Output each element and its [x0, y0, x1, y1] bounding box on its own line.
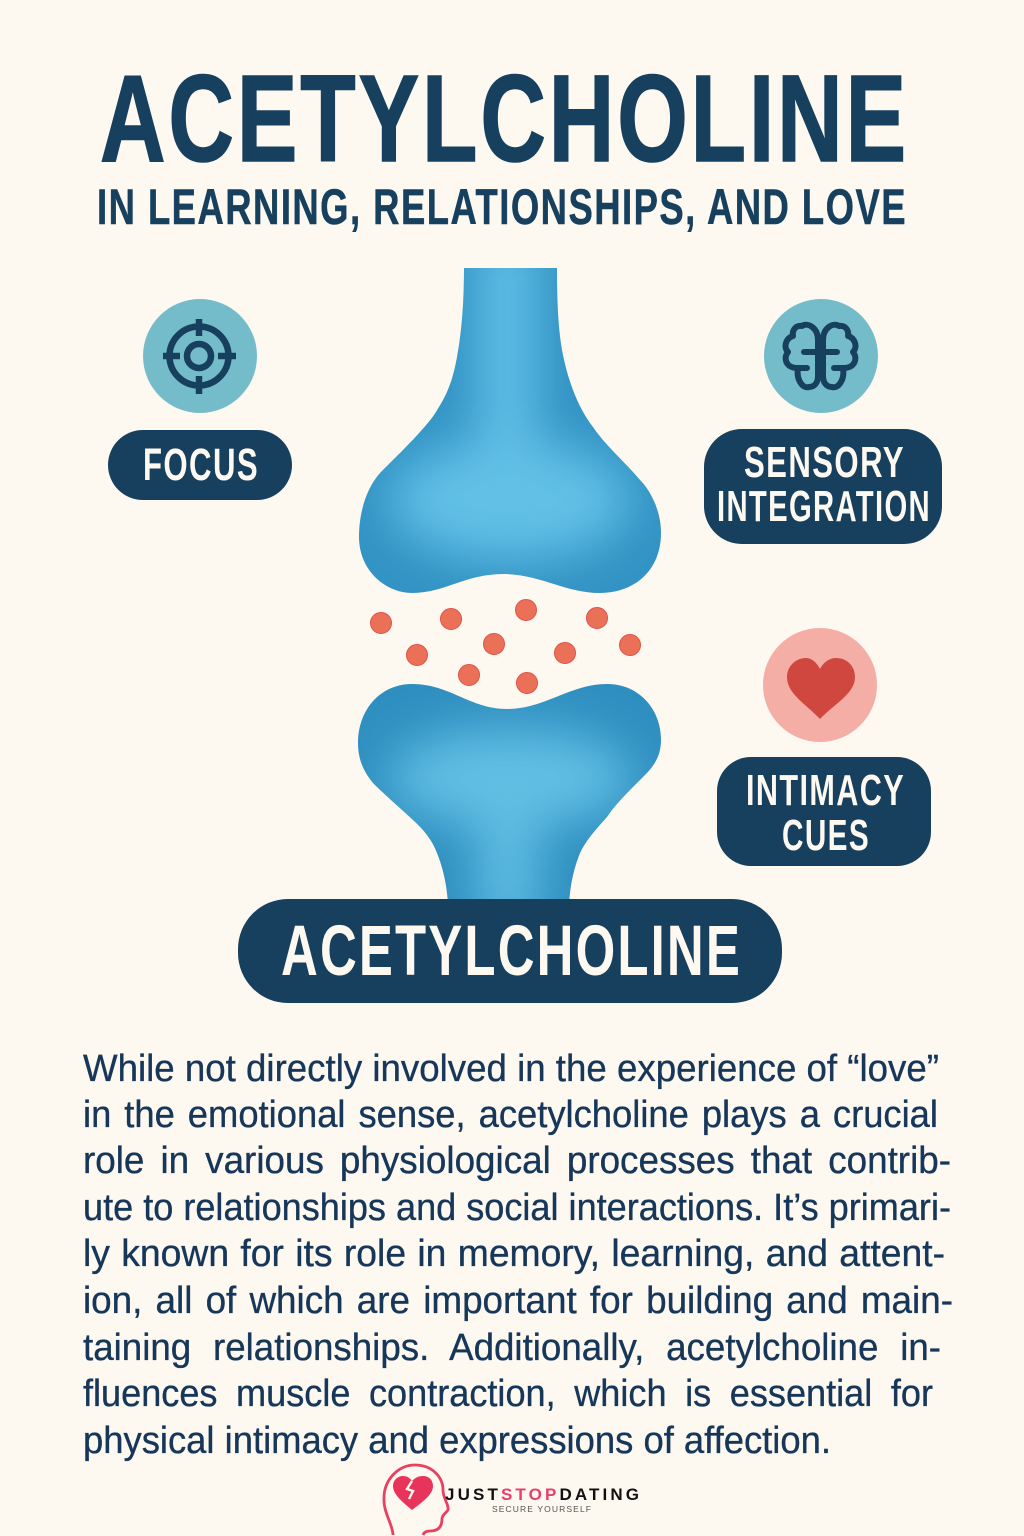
- body text: physical intimacy and expressions of affection.: [83, 1420, 831, 1462]
- logo tagline: SECURE YOURSELF: [492, 1504, 591, 1514]
- body text: role in various physiological processes that contrib-: [83, 1140, 951, 1182]
- body text: taining relationships. Additionally, acetylcholine in-: [83, 1327, 941, 1369]
- label: sensory integration: [704, 429, 942, 544]
- label: acetylcholine: [238, 899, 782, 1003]
- label: intimacy cues: [717, 757, 931, 866]
- body text: fluences muscle contraction, which is essential for: [83, 1373, 933, 1415]
- label: acetylcholine: ACETYLCHOLINE: [281, 912, 742, 991]
- postsynaptic neuron terminal: [358, 684, 661, 899]
- logo wordmark: JUSTSTOPDATING: [445, 1485, 642, 1504]
- presynaptic neuron terminal: [359, 268, 661, 593]
- body text: [83, 1048, 953, 1462]
- label: sensory integration: SENSORY: [744, 438, 905, 487]
- logo: just stop dating: [384, 1465, 642, 1535]
- body text: While not directly involved in the experience of “love”: [83, 1048, 939, 1090]
- label: intimacy cues: INTIMACY: [746, 766, 905, 815]
- neurotransmitter molecules: [370, 600, 640, 694]
- body text: ly known for its role in memory, learning, and attent-: [83, 1233, 945, 1275]
- icon: focus target: [143, 299, 257, 413]
- label: focus: FOCUS: [143, 439, 259, 490]
- icon: head with broken heart: [384, 1465, 448, 1535]
- label: focus: [108, 430, 292, 500]
- body text: ute to relationships and social interactions. It’s primari-: [83, 1187, 951, 1229]
- label: intimacy cues: CUES: [782, 811, 870, 860]
- body text: ion, all of which are important for building and main-: [83, 1280, 953, 1322]
- body text: in the emotional sense, acetylcholine plays a crucial: [83, 1094, 938, 1136]
- icon: brain: [764, 299, 878, 413]
- icon: heart: [763, 628, 877, 742]
